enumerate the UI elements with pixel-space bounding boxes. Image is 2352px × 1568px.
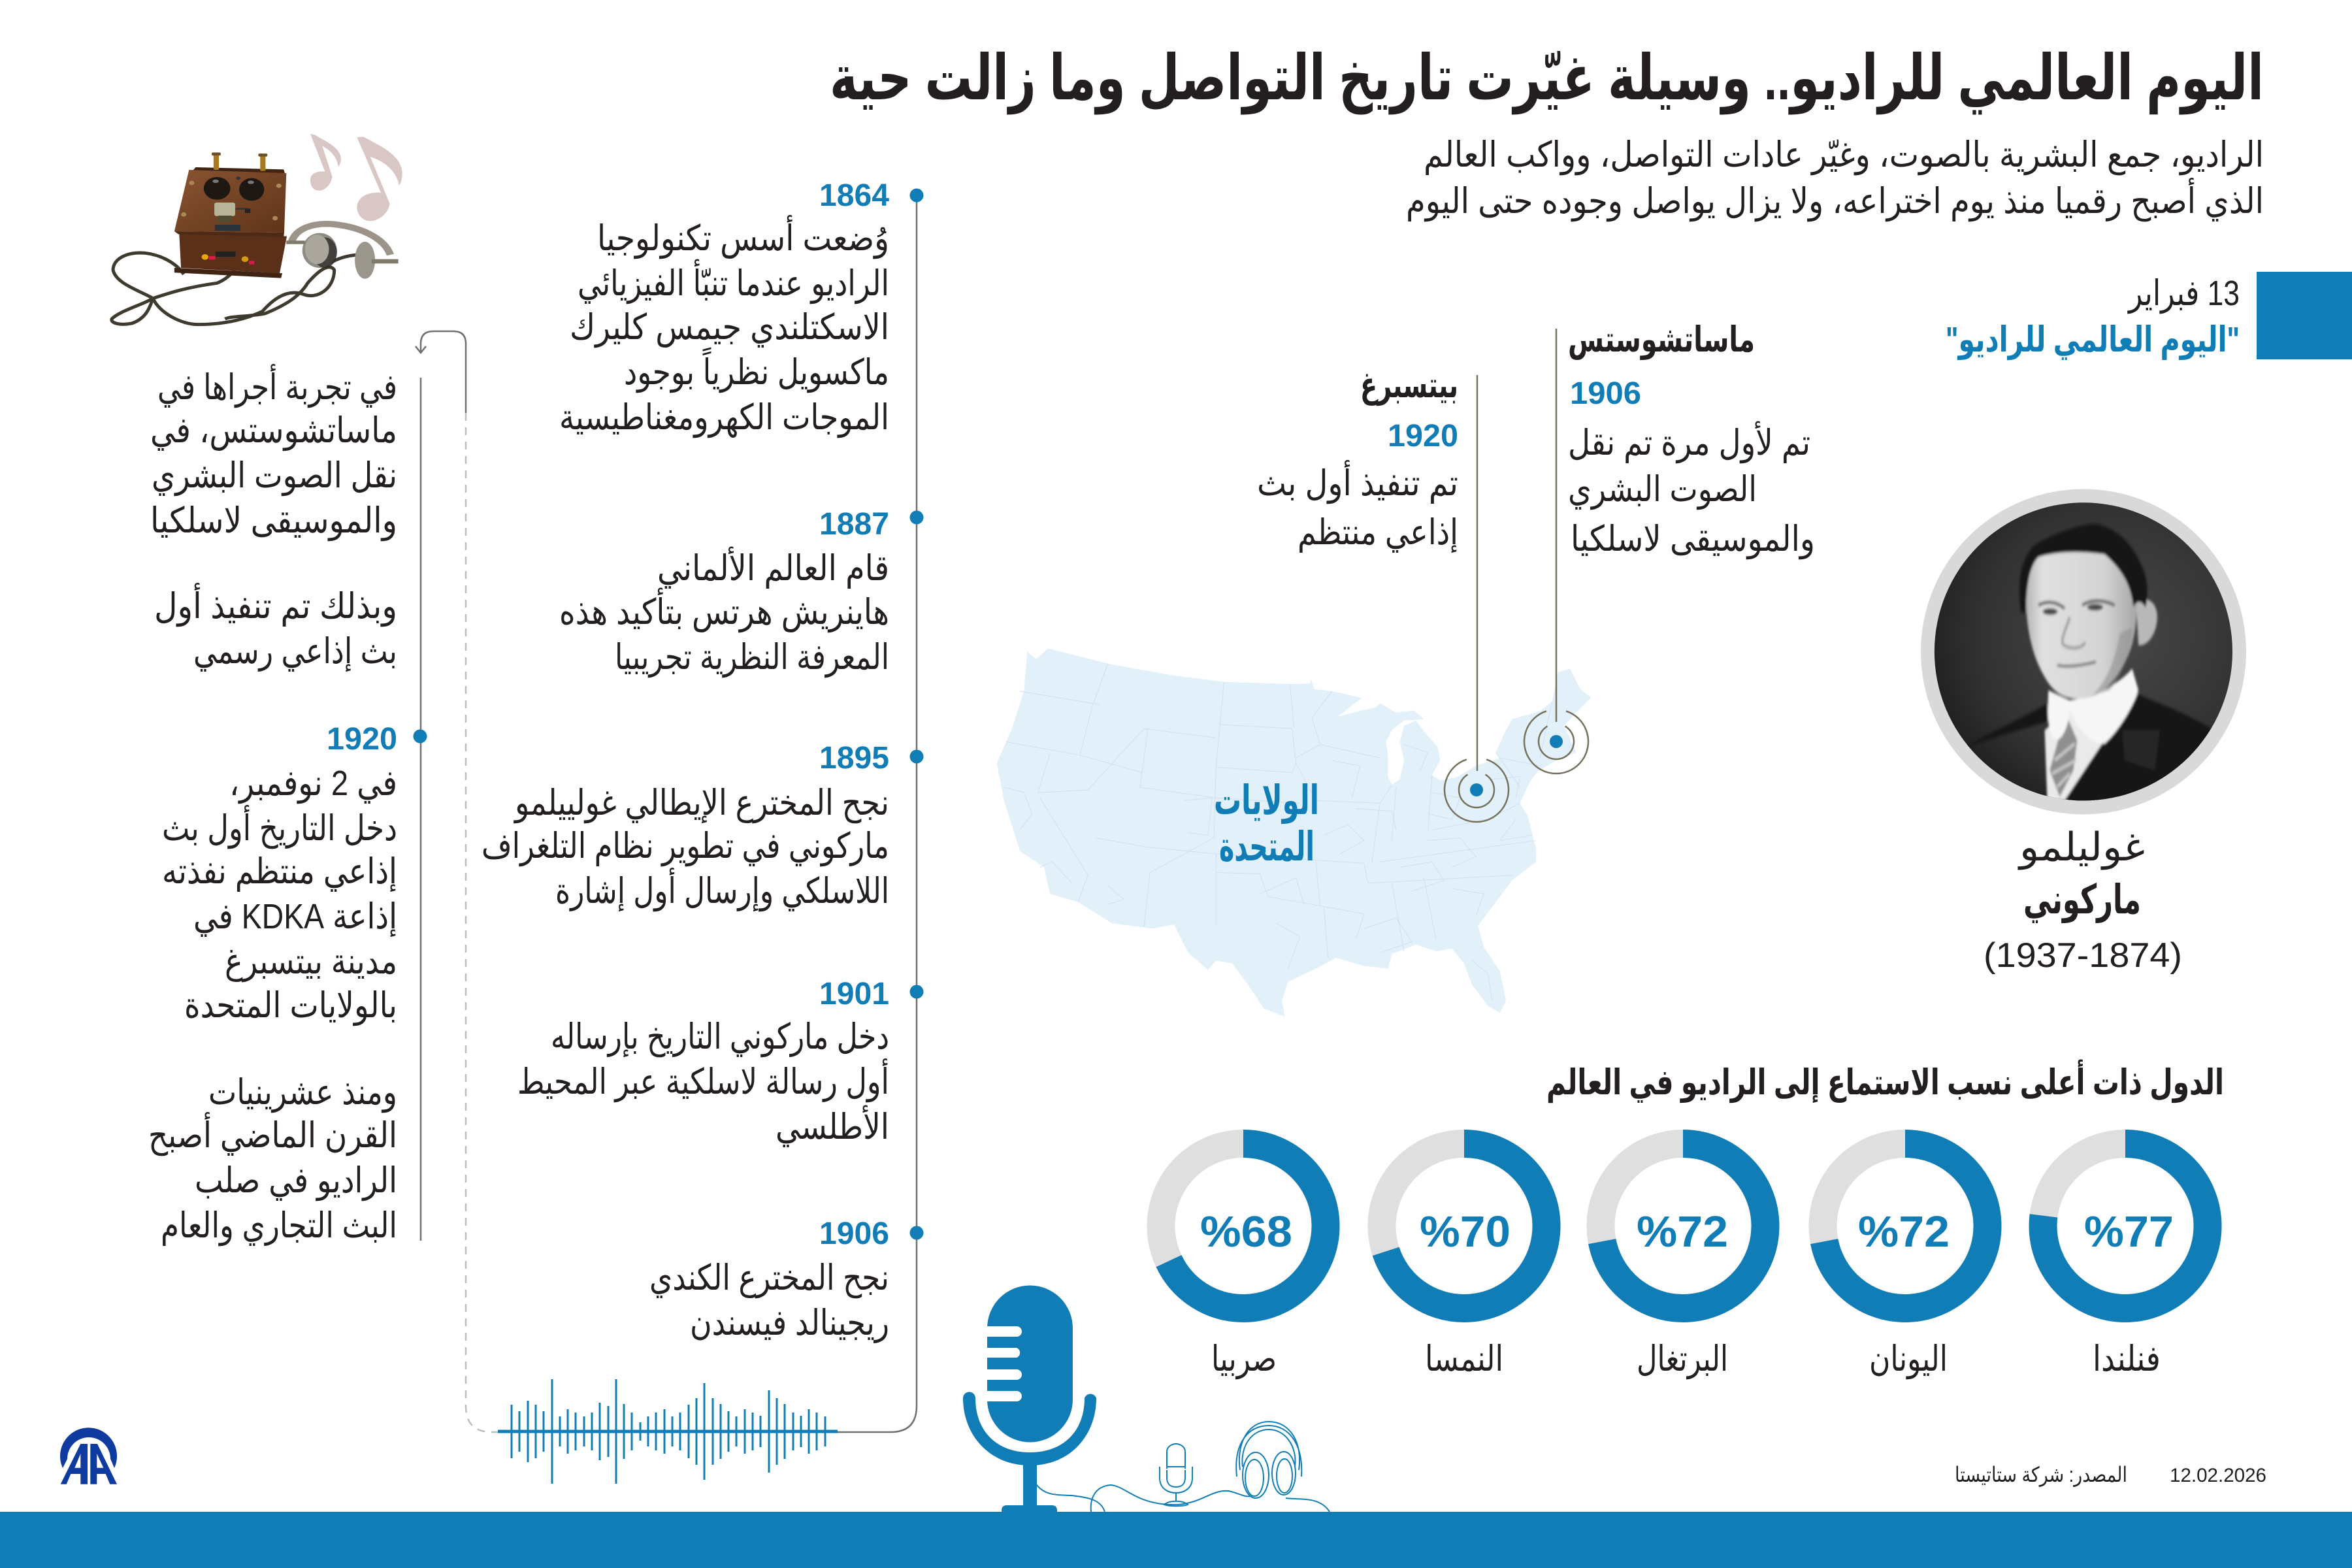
timeline entry: 1887 [559,507,889,678]
callout: Massachusetts 1906: الصوت البشري [1568,470,1757,510]
callout: Pittsburgh 1920: إذاعي منتظم [1298,513,1458,553]
donut chart: Austria 70% [1382,1143,1546,1379]
left column: 1906 continued: في تجربة أجراها في [157,364,397,408]
left column: 1920 entry: 1920 [327,722,397,757]
icon: music notes [310,134,402,221]
portrait caption [1984,825,2182,975]
map marker: Pittsburgh [1445,375,1509,822]
left column: 1906 continued [150,364,397,672]
timeline entry: 1895 [482,741,889,911]
icon: line-art microphone, headphones and cable [1036,1422,1330,1512]
left column: closing text: البث التجاري والعام [161,1206,397,1246]
donut chart: Portugal 72%: البرتغال [1637,1339,1728,1379]
portrait caption: (1937-1874) [1984,936,2182,975]
illustration: vintage radio with headphones [112,152,399,325]
portrait caption: ماركوني [2023,877,2141,923]
timeline entry: 1887: المعرفة النظرية تجريبيا [615,638,889,678]
timeline entry: 1901: الأطلسي [776,1105,889,1147]
portrait: Guglielmo Marconi [1919,489,2246,814]
callout: Pittsburgh 1920: 1920 [1388,419,1458,453]
timeline entry: 1906: 1906 [819,1217,889,1251]
callout: Pittsburgh 1920: بيتسبرغ [1360,366,1458,406]
left column: 1920 entry: إذاعة KDKA في [193,897,397,937]
left column: 1920 entry: مدينة بيتسبرغ [225,942,397,982]
map label: United States [1214,778,1319,870]
date label: 13 فبراير [2127,274,2240,314]
timeline entry: 1901 [517,977,889,1147]
footer bar [0,1512,2352,1568]
timeline entry: 1887: 1887 [819,507,889,542]
map label: United States: الولايات [1214,778,1319,824]
timeline entry: 1895: نجح المخترع الإيطالي غولييلمو [513,783,889,824]
timeline entry: 1864: الراديو عندما تنبّأ الفيزيائي [578,259,889,304]
timeline entry: 1887: هاينريش هرتس بتأكيد هذه [559,587,889,632]
timeline entry: 1901: 1901 [819,977,889,1011]
callout: Pittsburgh 1920: تم تنفيذ أول بث [1257,460,1458,504]
donut chart: Greece 72%: %72 [1858,1207,1950,1256]
donut chart: Greece 72%: اليونان [1869,1339,1948,1379]
source and date: 12.02.2026 [2170,1465,2266,1486]
icon: large microphone [963,1286,1096,1512]
donut chart: Portugal 72%: %72 [1637,1207,1728,1256]
callout: Massachusetts 1906: والموسيقى لاسلكيا [1571,519,1815,559]
subtitle: الراديو، جمع البشرية بالصوت، وغيّر عادات التواصل، وواكب العالم [1424,135,2264,176]
map: contiguous United States [997,649,1591,1017]
donut chart: Serbia 68%: صربيا [1211,1339,1277,1379]
donut chart: Austria 70%: %70 [1420,1207,1511,1256]
left column: closing text [148,1073,397,1246]
left column: closing text: الراديو في صلب [195,1161,397,1201]
audio waveform [498,1379,838,1484]
left column: 1906 continued: وبذلك تم تنفيذ أول [154,583,397,627]
timeline entry: 1887: قام العالم الألماني [657,546,889,589]
callout: Massachusetts 1906 [1568,320,1815,559]
timeline entry: 1901: دخل ماركوني التاريخ بإرساله [551,1017,889,1058]
left column: 1920 entry: بالولايات المتحدة [184,986,397,1026]
timeline entry: 1895: 1895 [819,741,889,776]
timeline entry: 1895: اللاسلكي وإرسال أول إشارة [555,868,889,911]
timeline entry: 1864: 1864 [819,178,889,213]
left column: 1920 entry: في 2 نوفمبر، [229,764,397,804]
timeline entry: 1864: الموجات الكهرومغناطيسية [559,398,889,438]
map label: United States: المتحدة [1219,825,1315,870]
donut chart: Austria 70%: النمسا [1425,1339,1503,1379]
callout: Massachusetts 1906: 1906 [1570,376,1641,411]
left column: 1906 continued: والموسيقى لاسلكيا [150,501,397,541]
date tab [2257,272,2352,359]
subtitle [1406,135,2264,222]
left column: 1906 continued: ماساتشوستس، في [150,411,397,451]
timeline entry: 1864: وُضعت أسس تكنولوجيا [597,215,889,259]
donut chart: Finland 77% [2043,1143,2208,1379]
map marker: Massachusetts [1524,329,1588,774]
donut chart: Finland 77%: %77 [2084,1207,2174,1256]
left column: 1920 entry: دخل التاريخ أول بث [162,805,397,849]
left column: closing text: القرن الماضي أصبح [148,1112,397,1156]
date label [1946,274,2240,360]
left column: closing text: ومنذ عشرينيات [208,1073,397,1113]
donut chart: Finland 77%: فنلندا [2093,1339,2161,1379]
date label: "اليوم العالمي للراديو" [1946,320,2240,360]
donut chart: Serbia 68%: %68 [1200,1207,1292,1256]
timeline entry: 1906 [649,1217,889,1343]
timeline entry: 1906: ريجينالد فيسندن [690,1303,889,1343]
source and date: المصدر: شركة ستاتيستا [1955,1463,2127,1487]
donut chart: Portugal 72% [1601,1143,1765,1379]
donut chart: Serbia 68% [1161,1143,1326,1379]
timeline entry: 1895: ماركوني في تطوير نظام التلغراف [482,826,889,866]
left column: 1920 entry: إذاعي منتظم نفذته [162,852,397,892]
timeline connector lines [416,195,917,1432]
timeline entry: 1864: ماكسويل نظرياً بوجود [624,347,889,393]
callout: Pittsburgh 1920 [1257,366,1458,553]
timeline entry: 1901: أول رسالة لاسلكية عبر المحيط [517,1058,889,1102]
timeline entry: 1864 [559,178,889,438]
left column: 1906 continued: نقل الصوت البشري [152,456,397,496]
callout: Massachusetts 1906: تم لأول مرة تم نقل [1568,421,1810,463]
icon: AA logo [60,1428,117,1484]
callout: Massachusetts 1906: ماساتشوستس [1568,320,1755,360]
portrait caption: غوليلمو [2017,825,2145,870]
left column: 1920 entry [162,722,397,1026]
timeline entry: 1906: نجح المخترع الكندي [649,1258,889,1299]
subtitle: الذي أصبح رقميا منذ يوم اختراعه، ولا يزال يواصل وجوده حتى اليوم [1406,178,2264,222]
donut chart: Greece 72% [1823,1143,1987,1379]
timeline dots [413,188,924,1240]
left column: 1906 continued: بث إذاعي رسمي [193,632,397,672]
timeline entry: 1864: الاسكتلندي جيمس كليرك [570,308,889,348]
source and date [1955,1463,2266,1487]
